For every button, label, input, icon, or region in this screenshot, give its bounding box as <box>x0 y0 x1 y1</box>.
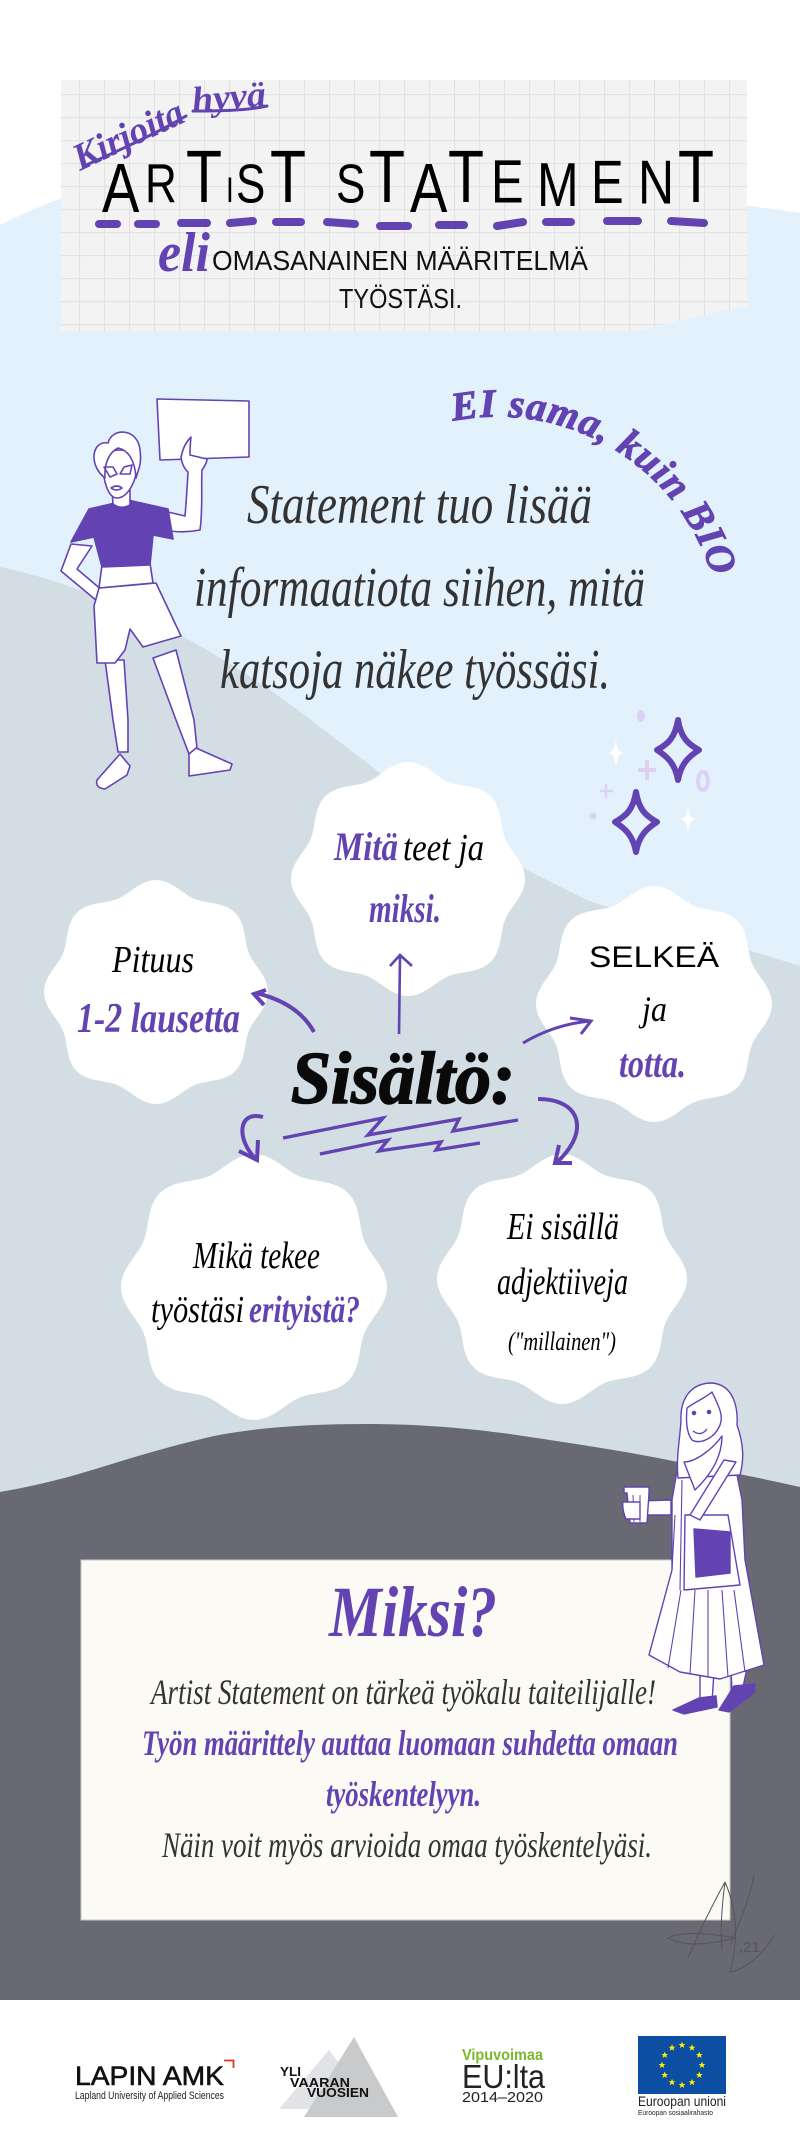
bubble: Mikä tekee: työstäsi <box>151 1289 244 1331</box>
logo: Lapin AMK: LAPIN AMK <box>75 2061 224 2091</box>
heading: Artist Statement: T <box>270 137 321 219</box>
logo: Lapin AMK: Lapland University of Applied Sciences <box>75 2090 224 2102</box>
text block: statement <box>194 474 645 701</box>
logo: Lapin AMK <box>75 2060 234 2102</box>
bubble: Ei sisällä adjektiiveja: adjektiiveja <box>497 1261 628 1303</box>
logo: Vipuvoimaa EU:lta: 2014–2020 <box>462 2089 543 2106</box>
arrow: lower left <box>239 1116 263 1160</box>
footer background <box>0 2000 800 2154</box>
text block: statement: Statement tuo lisää <box>247 474 592 536</box>
logo: Yli vaaran vuosien: VUOSIEN <box>307 2085 369 2100</box>
bubble: Pituus: 1-2 lausetta <box>77 996 240 1042</box>
heading: Artist Statement: T <box>678 137 714 219</box>
subtitle <box>158 222 588 314</box>
hair <box>94 432 141 478</box>
shorts <box>94 583 181 663</box>
heading: Sisältö: Sisältö: <box>291 1038 515 1120</box>
shoes <box>673 1696 717 1714</box>
heading: Artist Statement: T <box>186 137 222 219</box>
bubble: selkeä ja totta: ja <box>638 989 667 1029</box>
paragraph: Näin voit myös arvioida omaa työskentelyäsi. <box>161 1825 652 1865</box>
arrow: lower right <box>538 1099 577 1163</box>
coffee cup <box>624 1487 649 1523</box>
heading: Artist Statement: E <box>591 148 624 216</box>
heading: Artist Statement: E <box>491 147 524 216</box>
heading: Miksi: Miksi? <box>328 1572 497 1652</box>
logo: European Union flag: Euroopan unioni <box>638 2093 726 2109</box>
heading: Artist Statement: T <box>369 137 405 219</box>
arm <box>638 1500 671 1515</box>
head <box>103 450 137 498</box>
heading: Artist Statement: A <box>102 150 140 227</box>
bubble: Mikä tekee: Mikä tekee <box>192 1235 320 1277</box>
bubble: Pituus <box>44 880 268 1104</box>
logo: European Union flag: Euroopan sosiaalirahasto <box>638 2108 713 2117</box>
bubble: Mikä tekee <box>121 1154 387 1420</box>
bubble: Pituus: Pituus <box>111 939 194 981</box>
background: grey-blue hill <box>0 567 800 1600</box>
arrow: right <box>523 1018 591 1043</box>
bubble: Mitä teet ja miksi: Mitä <box>333 824 398 869</box>
heading: Kirjoita hyvä: Kirjoita <box>65 91 191 180</box>
midriff <box>99 563 153 588</box>
bubble: selkeä ja totta <box>536 886 772 1122</box>
arrow: up <box>390 955 412 1034</box>
heading: Artist Statement: R <box>145 152 177 214</box>
scarf <box>684 1436 722 1490</box>
logo: Vipuvoimaa EU:lta: Vipuvoimaa <box>462 2047 543 2064</box>
bubble: Mitä teet ja miksi <box>291 762 525 996</box>
bubble: Ei sisällä adjektiiveja <box>437 1154 687 1404</box>
logo: European Union flag <box>638 2036 726 2117</box>
bubble: Ei sisällä adjektiiveja: ("millainen") <box>508 1327 616 1356</box>
skirt pleats <box>668 1480 745 1677</box>
purple top <box>71 500 173 567</box>
heading: Artist Statement: T <box>448 137 484 219</box>
illustration: woman holding a card <box>61 399 249 789</box>
heading: Artist Statement: S <box>336 153 365 215</box>
heading: Kirjoita hyvä: hyvä <box>190 74 267 120</box>
bubble: Mikä tekee: erityistä? <box>249 1289 360 1331</box>
heading: Artist Statement: I <box>226 170 234 210</box>
card <box>157 399 249 460</box>
signature <box>668 1874 775 1972</box>
bag strap <box>690 1460 736 1520</box>
bubble: Mitä teet ja miksi: teet ja <box>403 827 484 869</box>
neck <box>112 490 130 507</box>
panel: Miksi <box>81 1560 730 1920</box>
curved heading: EI sama, kuin BIO: EI sama, kuin BIO <box>452 390 735 572</box>
arrow: left <box>254 990 314 1032</box>
illustration: woman with coffee and bag <box>623 1383 764 1714</box>
logo: Yli vaaran vuosien: VAARAN <box>290 2075 350 2090</box>
bubble: Ei sisällä adjektiiveja: Ei sisällä <box>506 1206 619 1248</box>
bag <box>684 1515 740 1590</box>
logo: Vipuvoimaa EU:lta <box>462 2047 546 2106</box>
face <box>687 1392 721 1442</box>
left arm <box>61 544 110 601</box>
subtitle: TYÖSTÄSI. <box>339 283 462 314</box>
panel: title <box>61 74 747 331</box>
bubble: Mitä teet ja miksi: miksi. <box>369 886 441 931</box>
decorative sparkles <box>590 710 708 852</box>
background: dark hill <box>0 1424 800 2000</box>
heading: Artist Statement: N <box>638 147 674 217</box>
logo: Yli vaaran vuosien: YLI <box>280 2064 301 2079</box>
bubble: selkeä ja totta: totta. <box>619 1041 686 1086</box>
text block: statement: informaatiota siihen, mitä <box>194 557 645 619</box>
heading: Artist Statement: A <box>410 150 448 227</box>
glasses and lips <box>104 465 132 490</box>
raised arm and hand <box>168 437 207 532</box>
heading: Kirjoita hyvä <box>65 74 267 180</box>
heading: Artist Statement: M <box>537 150 579 220</box>
bubble: selkeä ja totta: SELKEÄ <box>589 941 719 974</box>
legs <box>700 1672 714 1702</box>
paragraph <box>142 1672 678 1865</box>
subtitle: OMASANAINEN MÄÄRITELMÄ <box>212 245 588 276</box>
shoes <box>97 754 130 789</box>
logo: Yli vaaran vuosien <box>279 2037 398 2117</box>
lightning underline <box>283 1118 518 1154</box>
paragraph: työskentelyyn. <box>326 1774 481 1814</box>
dress <box>649 1460 764 1679</box>
legs <box>105 660 128 752</box>
background: light blue hill <box>0 157 800 1000</box>
subtitle: eli <box>158 222 210 284</box>
heading: Artist Statement: S <box>236 153 265 215</box>
signature: ,21 <box>739 1939 760 1956</box>
text block: statement: katsoja näkee työssäsi. <box>220 639 610 701</box>
hair <box>677 1383 743 1478</box>
dashed purple underline <box>99 221 704 226</box>
logo: Vipuvoimaa EU:lta: EU:lta <box>462 2058 546 2095</box>
